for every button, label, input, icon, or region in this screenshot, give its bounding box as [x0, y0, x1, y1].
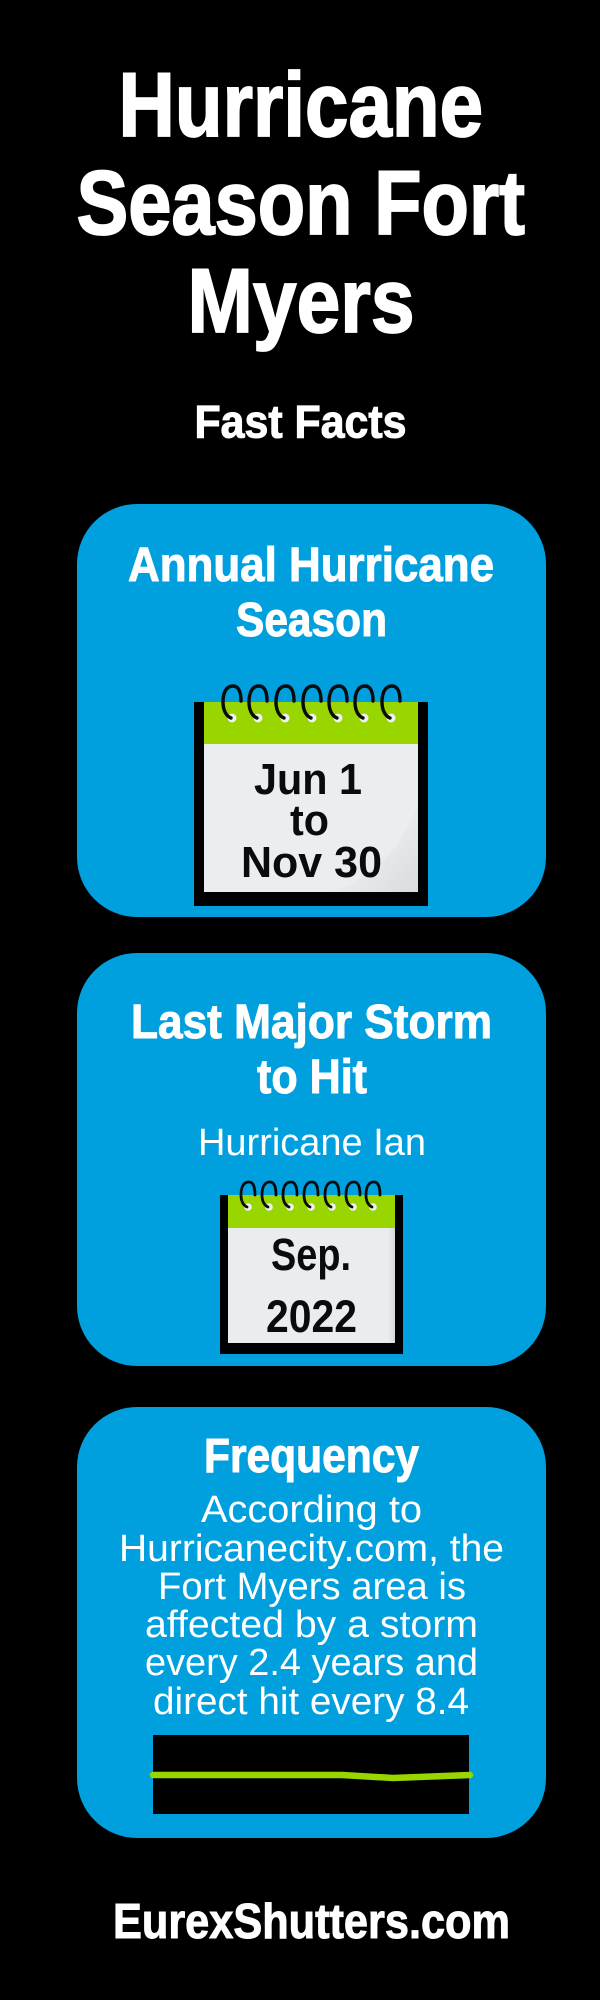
- subtitle: fast facts: Fast Facts: [194, 396, 406, 448]
- body text: storm frequency: Hurricanecity.com, the: [119, 1528, 504, 1570]
- body text: storm frequency: Fort Myers area is: [158, 1566, 466, 1608]
- heading: last major storm to hit: to Hit: [257, 1051, 367, 1104]
- heading: last major storm to hit: [131, 996, 492, 1104]
- heading: annual hurricane season: Season: [236, 594, 387, 647]
- icon: calendar with storm date: 2022: [266, 1291, 357, 1342]
- heading: last major storm to hit: Last Major Storm: [131, 996, 492, 1049]
- heading: annual hurricane season: Annual Hurricane: [128, 539, 494, 592]
- icon: calendar with season dates: Nov 30: [241, 838, 382, 887]
- body text: storm frequency: every 2.4 years and: [145, 1642, 478, 1684]
- icon: calendar with storm date: Sep.: [271, 1229, 351, 1280]
- title: [76, 55, 525, 352]
- panel: frequency: [77, 1407, 546, 1838]
- title: Season Fort: [76, 153, 525, 254]
- panel: annual hurricane season: [77, 504, 546, 917]
- title: Myers: [188, 251, 414, 352]
- body text: storm frequency: direct hit every 8.4: [153, 1681, 469, 1723]
- body text: storm frequency: [119, 1489, 504, 1723]
- heading: frequency: Frequency: [204, 1430, 419, 1483]
- body text: storm frequency: According to: [201, 1489, 422, 1531]
- heading: annual hurricane season: [128, 539, 494, 647]
- chart: frequency line: [153, 1735, 470, 1814]
- icon: calendar with season dates: to: [290, 796, 329, 845]
- title: Hurricane: [118, 55, 483, 156]
- icon: calendar with season dates: [194, 686, 428, 906]
- body text: storm frequency: affected by a storm: [145, 1604, 478, 1646]
- storm name: Hurricane Ian: [198, 1122, 426, 1164]
- icon: calendar with storm date: [220, 1182, 403, 1354]
- panel: last major storm to hit: [77, 953, 546, 1366]
- footer: website: EurexShutters.com: [113, 1895, 510, 1949]
- icon: calendar with season dates: Jun 1: [254, 755, 362, 804]
